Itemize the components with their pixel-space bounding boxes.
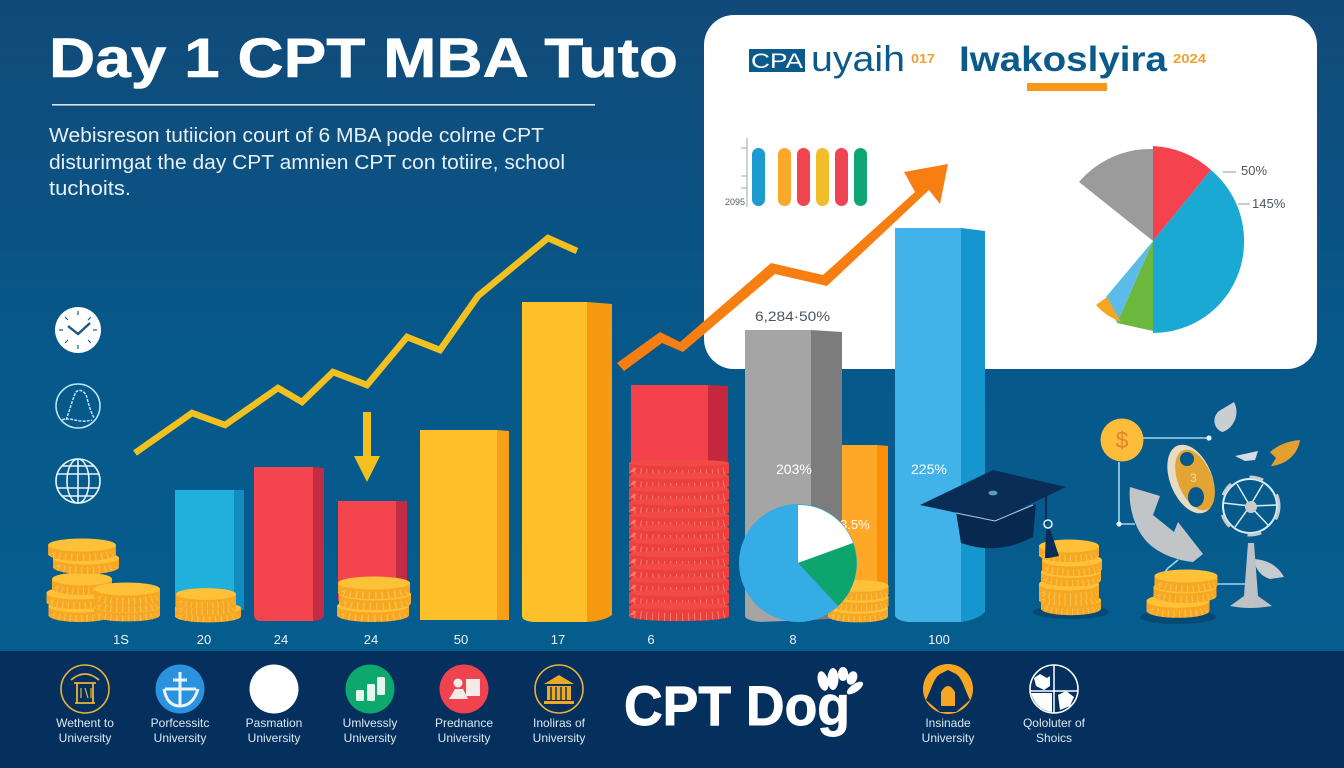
axis labels: 24 (274, 632, 288, 647)
footer item: Pasmation University (246, 664, 302, 745)
sidebar icon: globe (56, 459, 100, 503)
footer item: Prednance University (435, 664, 493, 745)
cap tassel (1044, 496, 1059, 558)
icon: dollar coin (1100, 418, 1144, 462)
axis labels: 1S (113, 632, 129, 647)
coin stack: right of cap (1033, 540, 1109, 619)
footer item: Pasmation University: University (248, 731, 300, 745)
logo: CPT Dog: CPT Dog (624, 674, 850, 737)
pie chart: overlay (739, 504, 857, 622)
sidebar icon: emblem (56, 384, 100, 428)
coin stack: centre right (1140, 570, 1218, 624)
footer item: Umlvessly University: Umlvessly (343, 716, 397, 730)
sidebar icon: clock (55, 307, 101, 353)
panel: white report card (704, 15, 1317, 369)
bar: red (254, 467, 324, 621)
footer item: Inoliras of University (533, 665, 586, 745)
icon: crescent badge: 3 (1190, 471, 1197, 485)
icon: graduation cap (920, 470, 1066, 548)
bar: orange (842, 445, 888, 600)
icon: dollar coin: $ (1116, 427, 1129, 453)
bar: tall blue (895, 228, 985, 622)
icon: wheel on stand (1221, 477, 1279, 608)
footer item: Qololuter of Shoics: Qololuter of (1023, 716, 1086, 730)
panel heading: Iwakoslyira 2024 (959, 40, 1207, 91)
bar: grey (745, 330, 842, 622)
bar: tall yellow (522, 302, 612, 622)
footer item: Prednance University: University (438, 731, 490, 745)
axis labels: 20 (197, 632, 211, 647)
bar: blue (175, 490, 244, 610)
pie chart (1079, 146, 1286, 333)
intro text block: Webisreson tutiicion court of 6 MBA pode colrne CPT (49, 125, 544, 147)
footer item: Wethent to University: University (59, 731, 111, 745)
footer item: Porfcessitc University (151, 664, 209, 745)
coin stack: left (46, 538, 160, 622)
panel heading: Iwakoslyira 2024: 2024 (1173, 51, 1207, 66)
footer item: Wethent to University (56, 665, 114, 745)
axis labels: 100 (928, 632, 950, 647)
coin stack: blue bar (175, 588, 241, 622)
footer item: Pasmation University: Pasmation (246, 716, 302, 730)
icon: leaves (1214, 402, 1300, 579)
bar: red with coin stack (629, 385, 729, 621)
mini bar chart: 2095 (725, 197, 745, 207)
illustration: finance cluster (1100, 402, 1300, 624)
pie chart: 50% (1241, 163, 1267, 178)
footer item: Porfcessitc University: Porfcessitc (151, 716, 209, 730)
footer item: Umlvessly University (343, 664, 397, 745)
axis labels: 17 (551, 632, 565, 647)
bar: yellow (420, 430, 509, 620)
arrow: yellow down arrow (354, 412, 380, 482)
title: Day 1 CPT MBA Tuto (49, 26, 678, 89)
icon: crescent badge (1158, 438, 1224, 520)
panel logo: CPA uyaih: uyaih (811, 38, 905, 79)
footer item: Qololuter of Shoics (1023, 665, 1086, 745)
coin stack: red bar (337, 576, 411, 622)
footer item: Qololuter of Shoics: Shoics (1036, 731, 1072, 745)
axis labels: 24 (364, 632, 378, 647)
footer item: Insinade University: University (922, 731, 974, 745)
panel logo: CPA uyaih: 017 (911, 51, 935, 66)
footer item: Inoliras of University: Inoliras of (533, 716, 586, 730)
arrow: orange growth arrow (617, 164, 948, 371)
icon: paw (816, 667, 865, 697)
bar: red short (338, 501, 407, 601)
label: 3.5%: 3.5% (840, 517, 870, 532)
line chart: yellow trend (135, 238, 577, 453)
panel logo: CPA uyaih: CPA (751, 50, 803, 73)
intro text block: disturimgat the day CPT amnien CPT con totiire, school (49, 152, 565, 174)
footer item: Umlvessly University: University (344, 731, 396, 745)
axis labels (113, 632, 950, 647)
panel heading: Iwakoslyira 2024: Iwakoslyira (959, 40, 1168, 79)
footer item: Insinade University (922, 664, 974, 745)
footer item: Insinade University: Insinade (925, 716, 971, 730)
axis labels: 50 (454, 632, 468, 647)
label: 6,284 50%: 6,284·50% (755, 308, 830, 324)
label: 203%: 203% (776, 461, 812, 477)
footer item: Porfcessitc University: University (154, 731, 206, 745)
panel logo: CPA uyaih (749, 38, 935, 79)
footer band (0, 651, 1344, 768)
coin stack: orange bar (828, 580, 888, 622)
axis labels: 6 (647, 632, 655, 647)
label: 225%: 225% (911, 461, 947, 477)
footer item: Prednance University: Prednance (435, 716, 493, 730)
icon: phone handset (1130, 487, 1203, 562)
pie chart: 145% (1252, 196, 1286, 211)
footer item: Wethent to University: Wethent to (56, 716, 114, 730)
intro text block: tuchoits. (49, 178, 131, 200)
intro text block (49, 125, 565, 200)
axis labels: 8 (789, 632, 797, 647)
mini bar chart (725, 138, 867, 207)
footer item: Inoliras of University: University (533, 731, 585, 745)
